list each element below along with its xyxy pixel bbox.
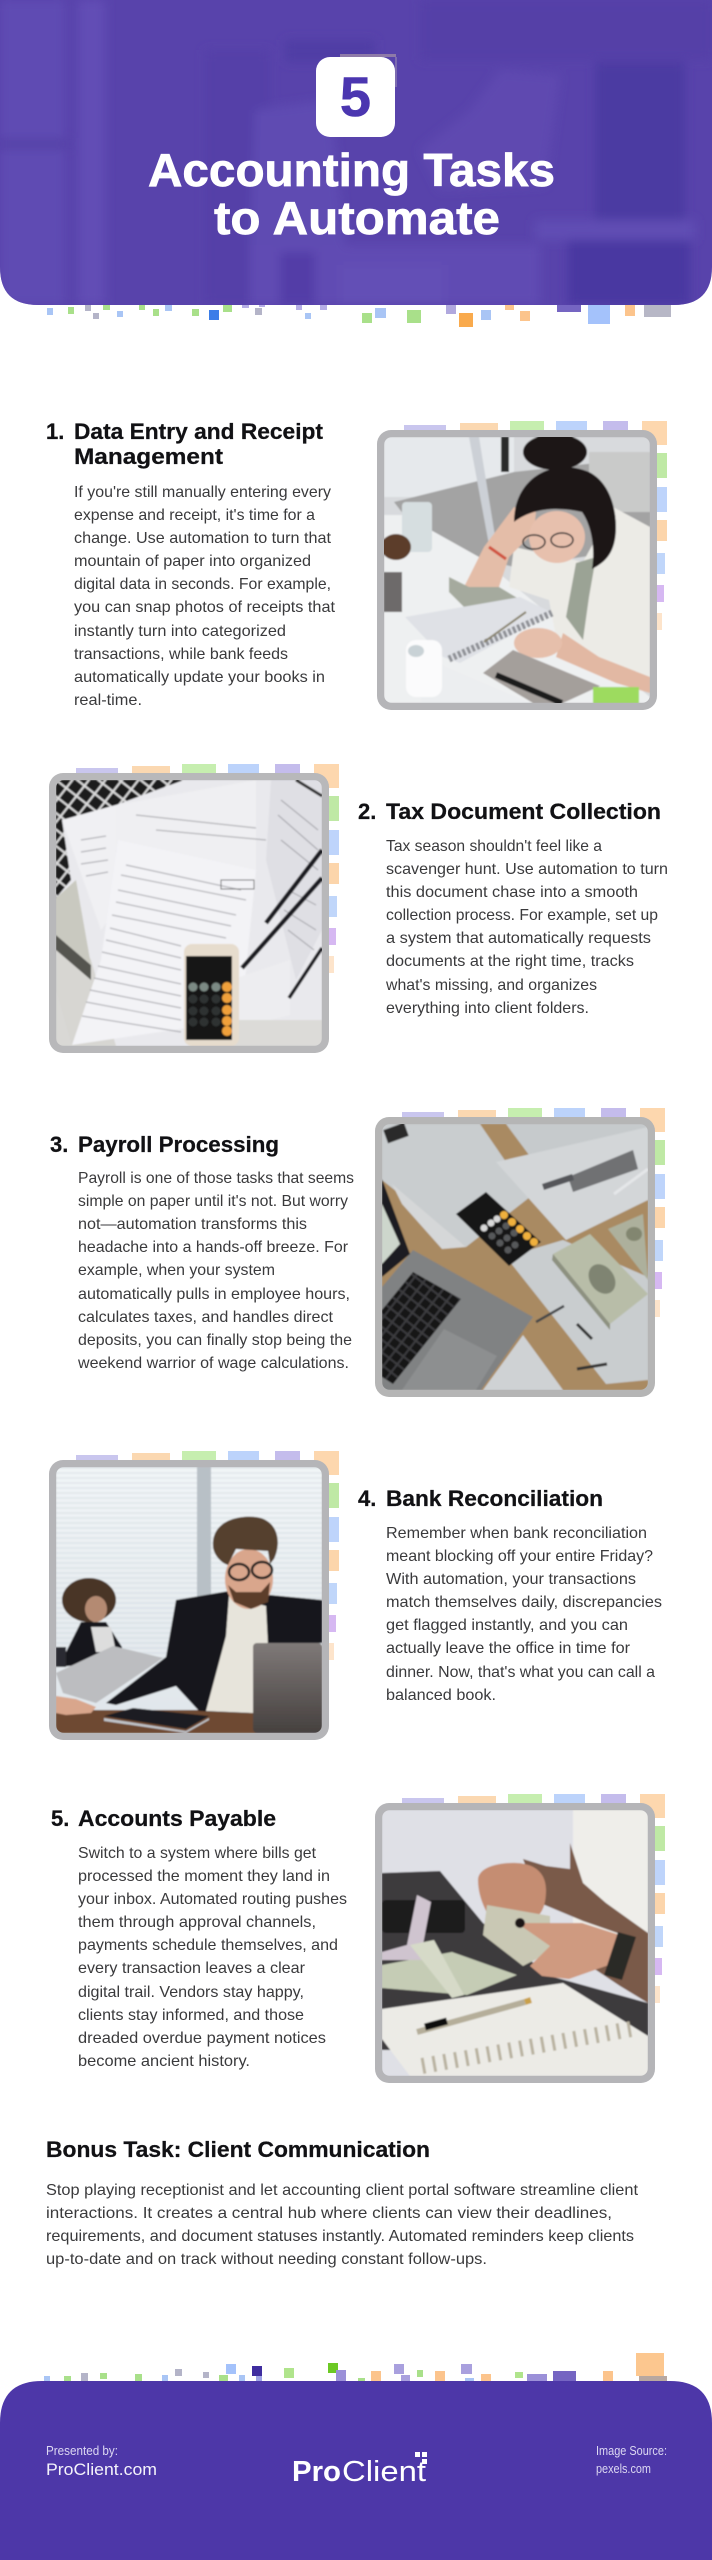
section 5 text: your inbox. Automated routing pushes <box>78 1891 347 1908</box>
section 1 text: digital data in seconds. For example, <box>74 576 331 593</box>
section 3 text: calculates taxes, and handles direct <box>78 1309 334 1326</box>
section 4 text: Bank Reconciliation <box>386 1486 603 1511</box>
section 3 text: weekend warrior of wage calculations. <box>77 1355 349 1372</box>
section 3 photo: laptop, calculator and cash <box>375 1108 665 1397</box>
section 5 text: payments schedule themselves, and <box>78 1937 338 1954</box>
section 4 text <box>358 1486 662 1704</box>
footer: image source: pexels.com <box>596 2462 651 2476</box>
section 2 text: collection process. For example, set up <box>386 907 658 924</box>
section 4 text: With automation, your transactions <box>386 1571 636 1588</box>
section 3 text: Payroll Processing <box>78 1132 279 1157</box>
section 1 text: Data Entry and Receipt <box>74 419 324 444</box>
section 1 text: Management <box>74 444 224 469</box>
footer squares strip <box>44 2353 667 2381</box>
section 1 text: instantly turn into categorized <box>74 623 286 640</box>
section 4 text: actually leave the office in time for <box>386 1640 631 1657</box>
section 5 text <box>51 1806 347 2070</box>
section 2 text: Tax season shouldn't feel like a <box>386 838 602 855</box>
section 2 text: documents at the right time, tracks <box>386 953 634 970</box>
title: to Automate <box>214 192 500 244</box>
section 1 text <box>46 419 336 709</box>
section 5 text: dreaded overdue payment notices <box>78 2030 326 2047</box>
section 3 text: Payroll is one of those tasks that seems <box>78 1170 354 1187</box>
hero banner <box>0 0 712 305</box>
section 3 text: not—automation transforms this <box>78 1216 307 1233</box>
footer: presented by <box>46 2443 157 2479</box>
footer: presented by: ProClient.com <box>46 2460 157 2479</box>
bonus task body: interactions. It creates a central hub where clients can view their deadlines, <box>46 2205 612 2222</box>
section 1 text: expense and receipt, it's time for a <box>74 507 315 524</box>
section 2 text: this document chase into a smooth <box>386 884 638 901</box>
section 3 text: example, when your system <box>78 1262 275 1279</box>
title <box>148 144 555 244</box>
section 4 text: dinner. Now, that's what you can call a <box>386 1664 655 1681</box>
section 3 text <box>50 1132 354 1372</box>
section 5 text: processed the moment they land in <box>78 1868 330 1885</box>
section 1 photo: stressed woman at desk <box>377 421 667 710</box>
bonus task body: requirements, and document statuses instantly. Automated reminders keep clients <box>46 2228 634 2245</box>
section 2 text: what's missing, and organizes <box>385 977 597 994</box>
title: Accounting Tasks <box>148 144 555 196</box>
footer: image source <box>596 2444 667 2476</box>
section 2 text <box>358 799 668 1017</box>
section 5 text: every transaction leaves a clear <box>78 1960 306 1977</box>
footer: ProClient logo <box>292 2452 427 2488</box>
bonus task heading: Bonus Task: Client Communication <box>46 2137 430 2162</box>
section 2 text: everything into client folders. <box>386 1000 589 1017</box>
section 2 text: 2. <box>358 799 376 824</box>
bonus task body <box>46 2182 639 2268</box>
section 1 text: change. Use automation to turn that <box>74 530 332 547</box>
footer: ProClient logo: Client <box>342 2456 426 2488</box>
section 5 text: clients stay informed, and those <box>78 2007 304 2024</box>
section 5 photo: hands counting cash over notebook <box>375 1794 665 2083</box>
section 3 text: headache into a hands-off breeze. For <box>78 1239 349 1256</box>
section 1 text: you can snap photos of receipts that <box>74 599 336 616</box>
section 4 text: 4. <box>358 1486 376 1511</box>
section 3 text: 3. <box>50 1132 68 1157</box>
section 1 text: mountain of paper into organized <box>74 553 311 570</box>
bonus task body: Stop playing receptionist and let accounting client portal software streamline client <box>46 2182 639 2199</box>
section 3 text: automatically pulls in employee hours, <box>78 1286 350 1303</box>
footer panel <box>0 2381 712 2560</box>
section 5 text: Switch to a system where bills get <box>78 1845 317 1862</box>
number badge <box>316 54 397 137</box>
section 5 text: them through approval channels, <box>78 1914 316 1931</box>
section 4 photo: man at laptop with paper <box>49 1451 339 1740</box>
section 5 text: 5. <box>51 1806 69 1831</box>
section 3 text: deposits, you can finally stop being the <box>78 1332 352 1349</box>
footer: image source: Image Source: <box>596 2444 667 2458</box>
section 5 text: become ancient history. <box>78 2053 250 2070</box>
hero photo overlay <box>0 0 712 305</box>
section 2 photo: tax forms and calculator <box>49 764 339 1053</box>
section 4 text: get flagged instantly, and you can <box>386 1617 628 1634</box>
number badge: 5 <box>340 65 371 128</box>
section 3 text: simple on paper until it's not. But worry <box>78 1193 348 1210</box>
section 2 text: Tax Document Collection <box>386 799 661 824</box>
section 1 text: If you're still manually entering every <box>74 484 331 501</box>
section 4 text: balanced book. <box>386 1687 496 1704</box>
footer: ProClient logo: Pro <box>292 2456 341 2488</box>
section 4 text: meant blocking off your entire Friday? <box>386 1548 653 1565</box>
bonus task body: up-to-date and on track without needing constant follow-ups. <box>46 2251 487 2268</box>
section 5 text: Accounts Payable <box>78 1806 276 1831</box>
section 2 text: scavenger hunt. Use automation to turn <box>386 861 668 878</box>
section 1 text: real-time. <box>74 692 142 709</box>
section 4 text: Remember when bank reconciliation <box>386 1525 647 1542</box>
section 1 text: transactions, while bank feeds <box>74 646 288 663</box>
footer: presented by: Presented by: <box>46 2443 118 2458</box>
section 2 text: a system that automatically requests <box>386 930 651 947</box>
header squares strip <box>47 305 671 327</box>
section 4 text: match themselves daily, discrepancies <box>386 1594 662 1611</box>
section 1 text: automatically update your books in <box>74 669 325 686</box>
section 1 text: 1. <box>46 419 64 444</box>
section 5 text: digital trail. Vendors stay happy, <box>78 1984 304 2001</box>
